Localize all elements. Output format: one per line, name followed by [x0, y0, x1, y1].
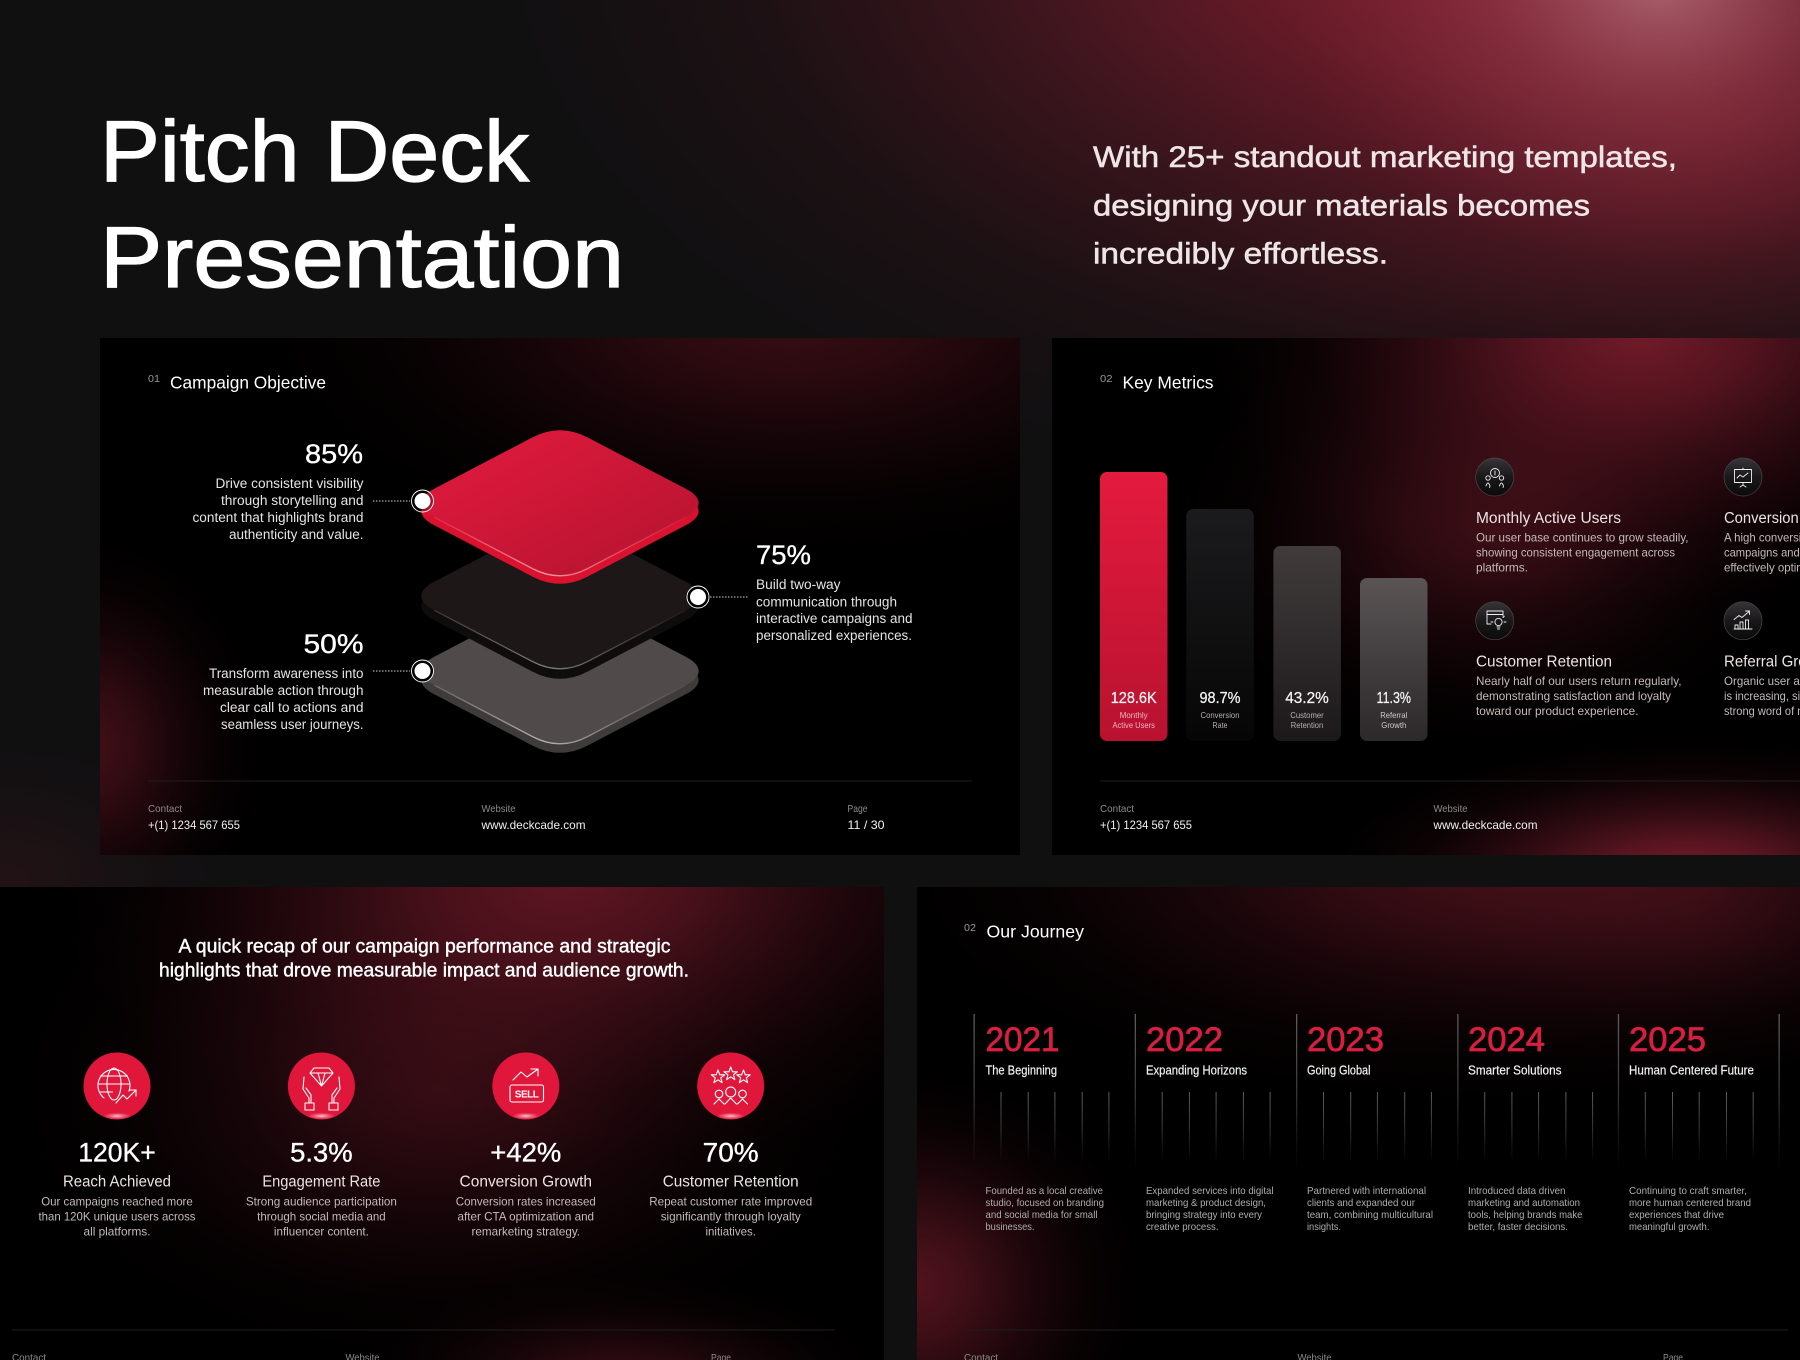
footer: Page — [848, 803, 868, 815]
timeline: 2022: 2022 — [1146, 1021, 1223, 1059]
callout 75%: Build two-way — [756, 577, 841, 592]
panel heading: 02 — [964, 922, 976, 934]
icon: sell sign with arrow: SELL — [515, 1090, 539, 1100]
footer — [1100, 781, 1800, 832]
bar: customer retention: Customer — [1290, 710, 1324, 720]
callout 75% — [756, 540, 912, 643]
bar: referral growth: 11.3% — [1377, 690, 1411, 707]
stat: customer retention: significantly through loyalty — [661, 1210, 801, 1224]
bar: monthly active users: Active Users — [1112, 720, 1155, 730]
timeline: 2022: Expanding Horizons — [1146, 1064, 1247, 1078]
layer: dark — [422, 554, 698, 679]
panel: campaign recap — [0, 887, 884, 1360]
callout 50%: measurable action through — [203, 683, 364, 698]
stat: engagement rate: Strong audience participation — [246, 1195, 397, 1209]
bar: referral growth — [1360, 578, 1428, 741]
callout 85%: 85% — [305, 439, 363, 469]
timeline: 2021: studio, focused on branding — [986, 1197, 1104, 1209]
footer — [964, 1330, 1788, 1360]
timeline: 2022 — [1146, 1021, 1274, 1233]
timeline: 2024: better, faster decisions. — [1468, 1221, 1568, 1233]
bar chart — [1100, 472, 1428, 741]
stat: conversion growth — [456, 1052, 596, 1239]
timeline: 2025: more human centered brand — [1629, 1197, 1751, 1209]
timeline: 2025: 2025 — [1629, 1021, 1706, 1059]
metric: customer retention: toward our product experience. — [1476, 704, 1638, 718]
subtitle text block: With 25+ standout marketing templates, — [1093, 141, 1677, 174]
timeline: 2024: Introduced data driven — [1468, 1185, 1566, 1197]
stat: conversion growth: Conversion Growth — [460, 1174, 592, 1191]
timeline: 2022: marketing & product design, — [1146, 1197, 1266, 1209]
panel: our journey — [917, 887, 1800, 1360]
bar: referral growth: Growth — [1381, 720, 1407, 730]
stat: customer retention: initiatives. — [705, 1225, 756, 1239]
timeline: 2023: Partnered with international — [1307, 1185, 1426, 1197]
timeline: 2024: 2024 — [1468, 1021, 1545, 1059]
timeline: 2021: Founded as a local creative — [986, 1185, 1103, 1197]
layer: gray — [422, 638, 699, 753]
bar: conversion rate: Rate — [1212, 720, 1228, 730]
bar: customer retention — [1273, 546, 1341, 741]
bar: conversion rate — [1186, 509, 1254, 741]
stat: conversion growth: +42% — [490, 1138, 561, 1168]
stat: conversion growth: after CTA optimization and — [458, 1210, 594, 1224]
timeline dividers — [974, 1014, 1780, 1170]
callout 85%: Drive consistent visibility — [216, 476, 364, 491]
title: Pitch Deck — [100, 104, 530, 200]
timeline: 2023 — [1307, 1021, 1433, 1233]
metric: customer retention: Customer Retention — [1476, 654, 1612, 671]
panel heading: 01 — [148, 373, 160, 385]
stat: reach achieved — [38, 1052, 196, 1239]
timeline: 2022: creative process. — [1146, 1221, 1218, 1233]
icon: presentation chart — [1724, 458, 1762, 496]
footer: +(1) 1234 567 655 — [1100, 818, 1192, 832]
footer — [148, 781, 972, 832]
timeline: 2025: Continuing to craft smarter, — [1629, 1185, 1747, 1197]
icon: rising bars — [1724, 602, 1762, 640]
callout 85%: through storytelling and — [221, 493, 364, 508]
connector dots — [373, 490, 748, 682]
timeline: 2021 — [986, 1021, 1104, 1233]
stat: customer retention: Customer Retention — [663, 1174, 799, 1191]
metric: monthly active users: showing consistent engagement across — [1476, 546, 1675, 560]
timeline: 2025 — [1629, 1021, 1754, 1233]
panel heading: Campaign Objective — [170, 372, 326, 392]
callout 75%: 75% — [756, 540, 811, 570]
title: Presentation — [100, 210, 624, 306]
timeline: 2022: bringing strategy into every — [1146, 1209, 1263, 1221]
bar: customer retention: 43.2% — [1285, 690, 1329, 707]
bar: monthly active users: 128.6K — [1111, 690, 1157, 707]
metric: monthly active users: platforms. — [1476, 561, 1528, 575]
footer: +(1) 1234 567 655 — [148, 818, 240, 832]
panel: campaign objective — [100, 338, 1020, 855]
metric: referral growth — [1724, 602, 1800, 718]
panel: key metrics — [1052, 338, 1800, 855]
recap heading: A quick recap of our campaign performance and strategic — [178, 936, 670, 958]
timeline: 2023: team, combining multicultural — [1307, 1209, 1433, 1221]
timeline: 2024: Smarter Solutions — [1468, 1064, 1562, 1078]
stat: engagement rate — [246, 1052, 397, 1239]
stacked layers diagram — [421, 430, 699, 753]
metric: customer retention: demonstrating satisfaction and loyalty — [1476, 689, 1671, 703]
bar: conversion rate: Conversion — [1200, 710, 1240, 720]
panel heading: Key Metrics — [1122, 372, 1214, 392]
footer: www.deckcade.com — [1433, 818, 1538, 832]
subtitle text block: designing your materials becomes — [1093, 190, 1590, 222]
timeline: 2022: Expanded services into digital — [1146, 1185, 1274, 1197]
callout 50%: 50% — [304, 629, 364, 659]
stat: customer retention: 70% — [703, 1138, 759, 1168]
timeline: 2023: clients and expanded our — [1307, 1197, 1415, 1209]
stat: customer retention — [649, 1052, 812, 1239]
bar: monthly active users — [1100, 472, 1168, 741]
stat: engagement rate: Engagement Rate — [262, 1174, 380, 1191]
timeline: 2024: marketing and automation — [1468, 1197, 1580, 1209]
stat: reach achieved: than 120K unique users across — [38, 1210, 196, 1224]
callout 50%: seamless user journeys. — [221, 717, 364, 732]
title — [100, 104, 624, 306]
metric: customer retention — [1476, 602, 1682, 718]
stat: reach achieved: 120K+ — [78, 1138, 156, 1168]
icon: hands with diamond — [288, 1052, 355, 1120]
timeline: 2023: 2023 — [1307, 1021, 1384, 1059]
panel heading: Our Journey — [986, 922, 1084, 942]
callout 85%: content that highlights brand — [192, 510, 364, 525]
timeline: 2023: insights. — [1307, 1221, 1341, 1233]
callout 85% — [192, 439, 364, 542]
metric: monthly active users: Our user base continues to grow steadily, — [1476, 531, 1688, 545]
stat: conversion growth: remarketing strategy. — [472, 1225, 580, 1239]
footer: 11 / 30 — [848, 818, 885, 832]
timeline: 2024: tools, helping brands make — [1468, 1209, 1583, 1221]
bar: conversion rate: 98.7% — [1200, 690, 1240, 707]
metric: monthly active users — [1476, 458, 1688, 575]
footer: Contact — [148, 803, 182, 815]
icon: people with coin — [1476, 458, 1514, 496]
callout 85%: authenticity and value. — [229, 527, 364, 542]
metric: monthly active users: Monthly Active Users — [1476, 510, 1621, 527]
footer: Website — [1434, 803, 1468, 815]
footer: Website — [482, 803, 516, 815]
recap heading — [159, 936, 689, 982]
layer: red — [421, 430, 699, 584]
bar: customer retention: Retention — [1291, 720, 1323, 730]
timeline: 2024 — [1468, 1021, 1583, 1233]
stat: engagement rate: 5.3% — [290, 1138, 353, 1168]
panel heading — [1100, 375, 1213, 392]
metric: customer retention: Nearly half of our users return regularly, — [1476, 674, 1682, 688]
subtitle text block: incredibly effortless. — [1093, 238, 1388, 270]
metric: conversion rate — [1724, 458, 1800, 575]
icon: globe with arrow — [84, 1052, 150, 1120]
recap heading: highlights that drove measurable impact and audience growth. — [159, 960, 689, 982]
timeline: 2025: experiences that drive — [1629, 1209, 1724, 1221]
stat: reach achieved: Reach Achieved — [63, 1174, 171, 1191]
panel heading: 02 — [1100, 373, 1113, 385]
stat: customer retention: Repeat customer rate improved — [649, 1195, 812, 1209]
timeline: 2021: businesses. — [986, 1221, 1034, 1233]
stat: reach achieved: all platforms. — [84, 1225, 150, 1239]
callout 75%: interactive campaigns and — [756, 611, 912, 626]
stat: reach achieved: Our campaigns reached more — [41, 1195, 193, 1209]
callout 50%: clear call to actions and — [220, 700, 364, 715]
stat: engagement rate: through social media and — [257, 1210, 386, 1224]
footer — [12, 1330, 835, 1360]
bar: referral growth: Referral — [1380, 710, 1407, 720]
callout 75%: personalized experiences. — [756, 628, 912, 643]
callout 50%: Transform awareness into — [209, 666, 364, 681]
timeline: 2021: The Beginning — [986, 1064, 1057, 1078]
timeline: 2021: and social media for small — [986, 1209, 1098, 1221]
timeline: 2023: Going Global — [1307, 1064, 1370, 1078]
icon: window with bulb — [1476, 602, 1514, 640]
icon: stars and customers — [697, 1052, 764, 1120]
stat: conversion growth: Conversion rates increased — [456, 1195, 596, 1209]
callout 75%: communication through — [756, 594, 897, 610]
icon: sell sign with arrow — [492, 1052, 559, 1120]
footer: Contact — [1100, 803, 1134, 815]
timeline: 2021: 2021 — [986, 1021, 1060, 1059]
stat: engagement rate: influencer content. — [274, 1225, 369, 1239]
bar: monthly active users: Monthly — [1120, 710, 1148, 720]
callout 50% — [203, 629, 364, 732]
footer: www.deckcade.com — [481, 818, 586, 832]
timeline: 2025: meaningful growth. — [1629, 1221, 1710, 1233]
timeline: 2025: Human Centered Future — [1629, 1064, 1754, 1078]
subtitle text block — [1093, 141, 1677, 270]
